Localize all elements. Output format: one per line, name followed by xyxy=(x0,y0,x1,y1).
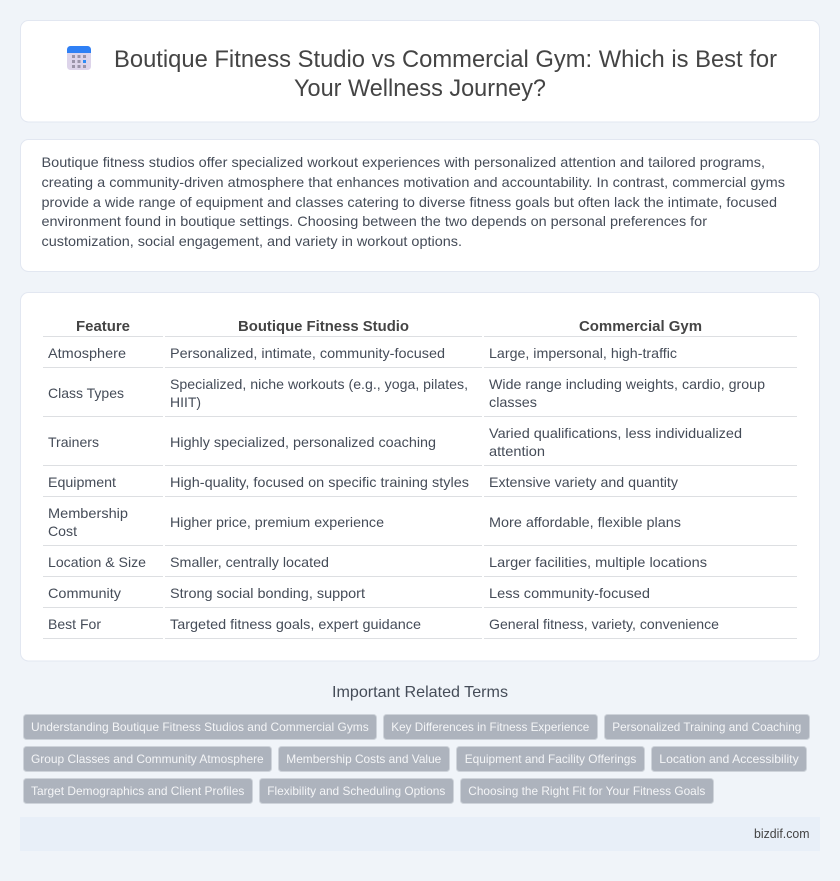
tag xyxy=(24,746,272,772)
row: trainers: Trainers xyxy=(48,434,99,450)
tag: Personalized Training and Coaching xyxy=(612,720,801,734)
row: location and size: Location & Size xyxy=(48,554,146,570)
footer xyxy=(20,817,820,851)
row: class types: Specialized, niche workouts (e.g., yoga, pilates, xyxy=(170,376,468,392)
row: class types: Wide range including weights, cardio, group xyxy=(489,376,765,392)
row: atmosphere: Large, impersonal, high-traffic xyxy=(489,345,677,361)
table header row: Boutique Fitness Studio xyxy=(238,319,409,335)
intro text: provide a wide range of equipment and classes catering to diverse fitness goals but often lack the intimate, focused xyxy=(42,194,777,210)
tag xyxy=(604,714,810,740)
tag xyxy=(652,746,806,772)
tag: Key Differences in Fitness Experience xyxy=(391,720,590,734)
row: trainers xyxy=(48,425,742,459)
row: community xyxy=(48,585,650,601)
tag xyxy=(260,778,454,804)
row: membership cost: Membership xyxy=(48,505,128,521)
tag: Group Classes and Community Atmosphere xyxy=(31,752,264,766)
tag: Target Demographics and Client Profiles xyxy=(31,784,244,798)
tag xyxy=(384,714,598,740)
intro text: creating a community-driven atmosphere that enhances motivation and accountability. In contrast, commercial gyms xyxy=(42,174,785,190)
tag: Choosing the Right Fit for Your Fitness Goals xyxy=(468,784,705,798)
table header row: Commercial Gym xyxy=(579,319,702,335)
intro text xyxy=(42,154,785,249)
panel: comparison table xyxy=(20,292,820,661)
row: best for xyxy=(48,616,719,632)
tag xyxy=(24,714,376,740)
tag: Location and Accessibility xyxy=(659,752,799,766)
heading: important related terms: Important Related Terms xyxy=(332,684,508,701)
row: location and size: Larger facilities, multiple locations xyxy=(489,554,707,570)
row: trainers: Varied qualifications, less individualized xyxy=(489,425,742,441)
tag xyxy=(460,778,714,804)
row: class types xyxy=(48,376,765,410)
row: trainers: Highly specialized, personalized coaching xyxy=(170,434,436,450)
row: best for: Best For xyxy=(48,616,101,632)
tag xyxy=(278,746,450,772)
row: class types: classes xyxy=(489,394,537,410)
tag list xyxy=(24,714,810,804)
tag: Flexibility and Scheduling Options xyxy=(267,784,445,798)
panel: intro paragraph xyxy=(20,140,820,272)
title: Your Wellness Journey? xyxy=(294,75,546,102)
table header row: Feature xyxy=(76,319,130,335)
tag xyxy=(24,778,252,804)
title: Boutique Fitness Studio vs Commercial Gym: Which is Best for xyxy=(114,46,777,73)
title xyxy=(114,46,777,102)
row: community: Less community-focused xyxy=(489,585,650,601)
intro text: Boutique fitness studios offer specialized workout experiences with personalized attention and tailored programs, xyxy=(42,154,765,170)
intro text: environment found in boutique settings. Choosing between the two depends on personal preferences for xyxy=(42,213,707,229)
table header row xyxy=(76,319,702,335)
row: equipment: Equipment xyxy=(48,474,116,490)
row: atmosphere: Atmosphere xyxy=(48,345,126,361)
row: membership cost: Cost xyxy=(48,523,77,539)
row: equipment xyxy=(48,474,678,490)
panel: title header xyxy=(20,20,820,122)
row: class types: Class Types xyxy=(48,385,124,401)
row: atmosphere xyxy=(48,345,677,361)
tag: Equipment and Facility Offerings xyxy=(465,752,636,766)
footer: bizdif.com xyxy=(754,827,810,841)
tag: Membership Costs and Value xyxy=(286,752,442,766)
row: membership cost: More affordable, flexible plans xyxy=(489,514,681,530)
row: atmosphere: Personalized, intimate, community-focused xyxy=(170,345,445,361)
tag: Understanding Boutique Fitness Studios and Commercial Gyms xyxy=(31,720,369,734)
row: membership cost xyxy=(48,505,681,539)
row: membership cost: Higher price, premium experience xyxy=(170,514,384,530)
row: equipment: High-quality, focused on specific training styles xyxy=(170,474,469,490)
row: location and size xyxy=(48,554,707,570)
tag xyxy=(456,746,644,772)
row: trainers: attention xyxy=(489,443,545,459)
icon: calendar xyxy=(67,46,91,70)
intro text: customization, social engagement, and variety in workout options. xyxy=(42,233,462,249)
row: equipment: Extensive variety and quantity xyxy=(489,474,678,490)
row: best for: Targeted fitness goals, expert guidance xyxy=(170,616,421,632)
row: best for: General fitness, variety, convenience xyxy=(489,616,719,632)
row: class types: HIIT) xyxy=(170,394,201,410)
row: community: Strong social bonding, support xyxy=(170,585,365,601)
row: location and size: Smaller, centrally located xyxy=(170,554,329,570)
row: community: Community xyxy=(48,585,121,601)
